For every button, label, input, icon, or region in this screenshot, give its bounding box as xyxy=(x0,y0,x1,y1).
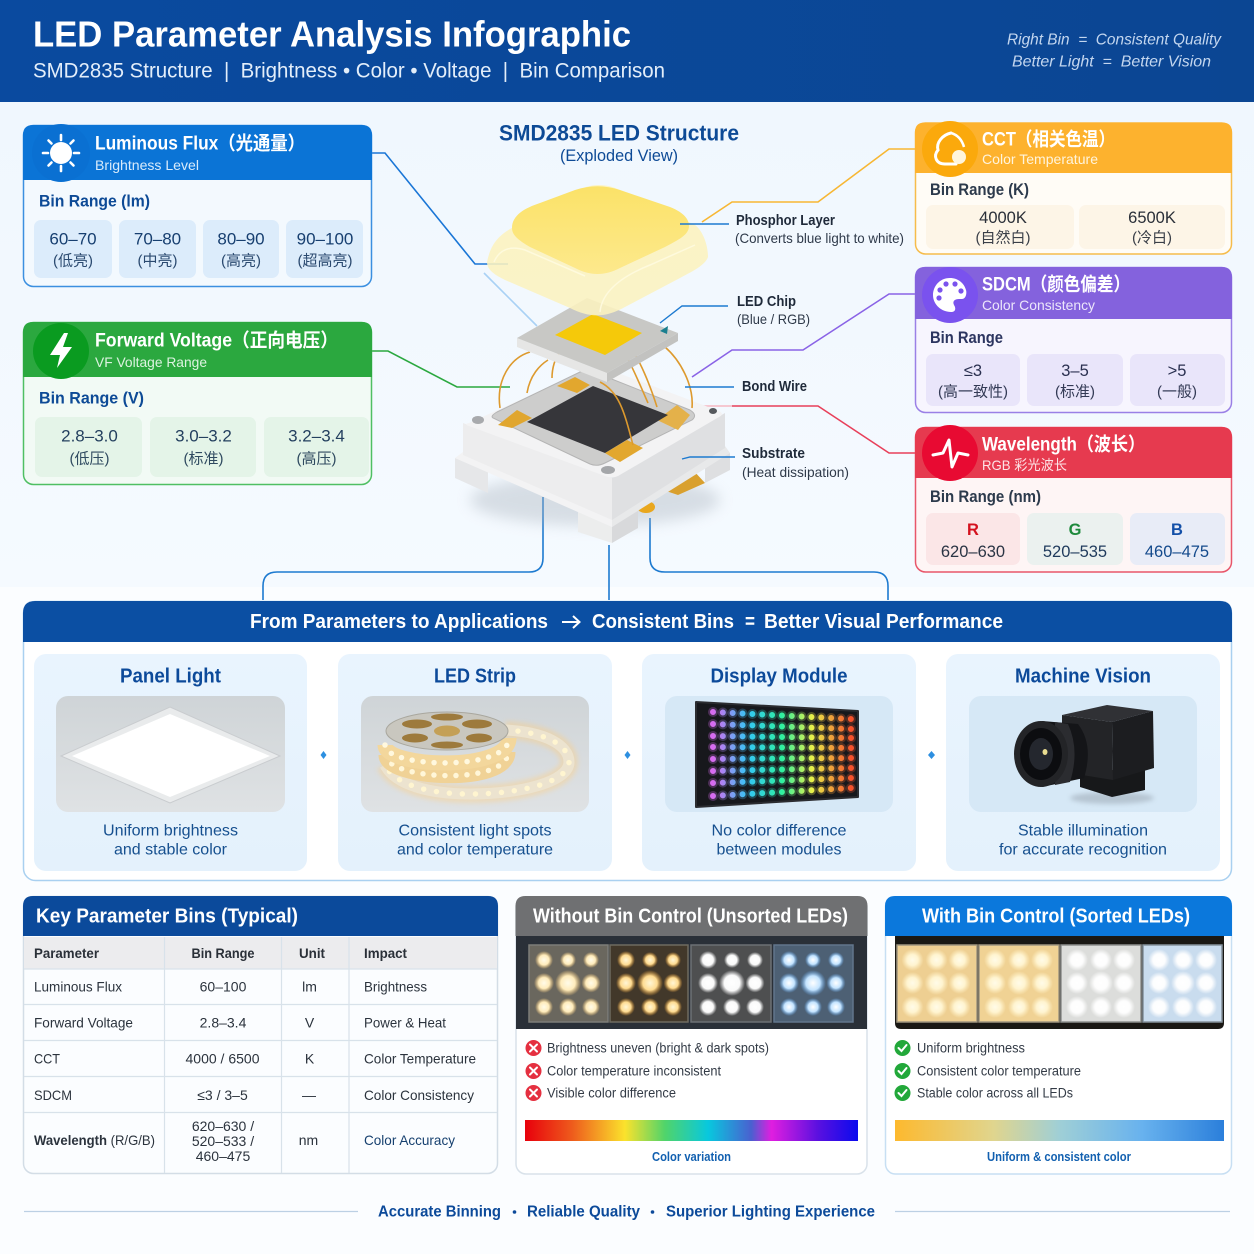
card: machine vision: Machine Vision xyxy=(1015,664,1151,688)
bin cells: (超高亮) xyxy=(298,252,352,270)
label: substrate: Substrate xyxy=(742,446,805,462)
mounting holes xyxy=(472,416,484,424)
panel: without bin control: Without Bin Control (Unsorted LEDs) xyxy=(533,906,848,928)
title: LED Parameter Analysis Infographic xyxy=(33,14,631,54)
table rows: SDCM xyxy=(34,1087,72,1103)
table rows: Brightness xyxy=(364,978,427,994)
table rows: 2.8–3.4 xyxy=(200,1014,247,1030)
banner heading xyxy=(250,611,1003,633)
table rows xyxy=(34,978,476,1164)
panel: SDCM: Color Consistency xyxy=(982,297,1095,313)
icon: check xyxy=(894,1063,910,1079)
upper section background xyxy=(0,102,1254,587)
panel: wavelength xyxy=(915,425,1232,572)
table rows: lm xyxy=(302,978,317,994)
icon: cross xyxy=(526,1063,542,1079)
panel: SDCM xyxy=(915,267,1232,412)
substrate base xyxy=(455,366,730,543)
bin cells xyxy=(926,205,1225,249)
panel: with bin control: With Bin Control (Sorted LEDs) xyxy=(922,906,1190,928)
panel: without bin control xyxy=(516,896,868,1174)
footer tagline: Superior Lighting Experience xyxy=(666,1204,875,1220)
panel: luminous flux: Luminous Flux（光通量） xyxy=(95,132,305,154)
bin cells: (中亮) xyxy=(138,252,178,270)
icon: arrow xyxy=(562,616,580,628)
bin cells: (冷白) xyxy=(1132,230,1172,246)
structure heading xyxy=(499,120,739,165)
icon: cross xyxy=(526,1085,542,1101)
panel: forward voltage: Bin Range (V) xyxy=(39,388,144,408)
issue list: Visible color difference xyxy=(547,1086,676,1100)
table rows: Luminous Flux xyxy=(34,978,122,994)
card: panel light: Uniform brightness xyxy=(103,822,238,840)
LED chip plate xyxy=(517,298,678,382)
card: panel light: Panel Light xyxy=(120,664,221,688)
image: industrial camera xyxy=(969,696,1197,812)
bin cells: >5 xyxy=(1168,362,1186,380)
bin cells: 460–475 xyxy=(1145,543,1209,561)
bin cells: (标准) xyxy=(184,450,224,468)
header tagline xyxy=(1007,32,1222,70)
panel: key parameter table xyxy=(23,896,498,1174)
uniform color bar xyxy=(895,1120,1224,1141)
icon: check xyxy=(894,1085,910,1101)
card: LED strip: Consistent light spots xyxy=(398,822,552,840)
bin cells xyxy=(926,513,1225,565)
color variation bar xyxy=(525,1120,858,1141)
panel: CCT xyxy=(915,121,1232,254)
image: sorted LED panels xyxy=(895,936,1224,1029)
panel: CCT: Bin Range (K) xyxy=(930,181,1029,199)
table header row: Bin Range xyxy=(192,945,255,961)
table rows: Color Consistency xyxy=(364,1087,474,1103)
table header row: Unit xyxy=(299,945,325,961)
panel: wavelength: Bin Range (nm) xyxy=(930,488,1041,506)
issue list: Color temperature inconsistent xyxy=(547,1064,721,1078)
table rows: nm xyxy=(299,1132,318,1148)
header band xyxy=(0,0,1254,102)
LED exploded structure illustration xyxy=(455,185,730,543)
panel: with bin control xyxy=(885,896,1232,1174)
gold pads xyxy=(557,377,590,393)
subtitle: SMD2835 Structure | Brightness • Color • Voltage | Bin Comparison xyxy=(33,60,665,82)
benefit list xyxy=(894,1040,1081,1101)
label: phosphor layer xyxy=(735,213,904,246)
structure leader lines xyxy=(660,224,735,459)
bond wires xyxy=(499,347,692,445)
benefit list: Consistent color temperature xyxy=(917,1064,1081,1078)
table rows: 60–100 xyxy=(200,978,247,994)
bin cells: (高一致性) xyxy=(938,384,1008,400)
icon: pulse wave xyxy=(922,425,978,481)
arrow marker xyxy=(624,751,630,759)
benefit list: Uniform brightness xyxy=(917,1040,1025,1056)
bin cells: 60–70 xyxy=(49,230,97,248)
table rows: CCT xyxy=(34,1050,60,1066)
bin cells: (高亮) xyxy=(221,252,261,270)
icon: palette xyxy=(922,267,978,323)
table rows: Color Accuracy xyxy=(364,1132,455,1148)
table rows: ≤3 / 3–5 xyxy=(197,1087,248,1103)
card: machine vision: Stable illumination xyxy=(1018,822,1148,840)
connector lines: parameters to structure xyxy=(263,149,915,600)
table rows: V xyxy=(305,1014,315,1030)
table header row: Parameter xyxy=(34,945,100,961)
bin cells: 620–630 xyxy=(941,543,1005,561)
label: bond wire: Bond Wire xyxy=(742,379,807,395)
label: LED chip xyxy=(737,294,810,327)
bin cells: 3.0–3.2 xyxy=(175,426,232,446)
card: machine vision xyxy=(946,654,1220,871)
card: display module: Display Module xyxy=(710,664,848,688)
table rows: Wavelength (R/G/B) xyxy=(34,1132,155,1148)
card: LED strip: LED Strip xyxy=(434,664,516,688)
bin cells xyxy=(926,354,1225,406)
table rows: 620–630 / xyxy=(192,1118,254,1134)
label: substrate xyxy=(742,446,849,480)
panel: with bin control: Uniform & consistent color xyxy=(987,1150,1131,1164)
image: unsorted LED panels xyxy=(516,936,867,1029)
card: display module: No color difference xyxy=(712,822,847,840)
panel: wavelength: RGB 彩光波长 xyxy=(982,457,1067,473)
label: phosphor layer: (Converts blue light to white) xyxy=(735,230,904,246)
panel: SDCM: Bin Range xyxy=(930,329,1003,347)
panel: applications xyxy=(23,601,1232,880)
bin cells: R xyxy=(967,521,979,539)
bin cells: (低压) xyxy=(70,450,110,468)
structure heading: SMD2835 LED Structure xyxy=(499,120,739,146)
panel: CCT: Color Temperature xyxy=(982,151,1098,167)
panel: luminous flux xyxy=(23,124,372,286)
table rows: 4000 / 6500 xyxy=(186,1050,260,1066)
bin cells xyxy=(35,417,369,477)
banner heading: Consistent Bins xyxy=(592,611,734,633)
panel: CCT: CCT（相关色温） xyxy=(982,128,1115,150)
card: panel light: and stable color xyxy=(114,842,228,858)
bin cells: (一般) xyxy=(1157,384,1197,400)
bin cells: (标准) xyxy=(1055,384,1095,400)
phosphor layer dome xyxy=(487,185,708,315)
header tagline: Better Light = Better Vision xyxy=(1012,54,1211,70)
label: LED chip: (Blue / RGB) xyxy=(737,311,810,327)
bin cells: 70–80 xyxy=(134,230,181,248)
card: display module: between modules xyxy=(716,842,842,858)
panel: forward voltage: VF Voltage Range xyxy=(95,354,207,370)
bin cells: (自然白) xyxy=(976,230,1030,246)
label: LED chip: LED Chip xyxy=(737,294,796,310)
structure heading: (Exploded View) xyxy=(560,147,678,165)
panel: SDCM: SDCM（颜色偏差） xyxy=(982,274,1130,296)
bin cells: G xyxy=(1069,521,1081,539)
footer tagline xyxy=(24,1204,1230,1220)
bin cells xyxy=(34,220,363,278)
table rows: K xyxy=(305,1050,315,1066)
bin cells: 2.8–3.0 xyxy=(61,426,118,446)
icon: cross xyxy=(526,1040,542,1056)
bin cells: 3.2–3.4 xyxy=(288,426,345,446)
banner heading: From Parameters to Applications xyxy=(250,611,548,633)
image: flat panel xyxy=(56,696,285,812)
panel: forward voltage: Forward Voltage（正向电压） xyxy=(95,330,338,352)
panel: key parameter table: Key Parameter Bins (Typical) xyxy=(36,906,298,928)
panel: luminous flux: Bin Range (lm) xyxy=(39,192,150,210)
table rows: Color Temperature xyxy=(364,1050,476,1066)
card: LED strip xyxy=(338,654,612,871)
bin cells: 4000K xyxy=(979,209,1027,227)
panel: forward voltage xyxy=(23,322,372,484)
image: LED strip reel xyxy=(361,696,589,812)
bin cells: 80–90 xyxy=(217,230,265,248)
table rows: Forward Voltage xyxy=(34,1014,133,1030)
banner heading: = xyxy=(745,611,755,633)
banner heading: Better Visual Performance xyxy=(764,611,1003,633)
table rows: 460–475 xyxy=(196,1148,250,1164)
card: panel light xyxy=(34,654,307,871)
icon: sun xyxy=(32,124,90,182)
label: substrate: (Heat dissipation) xyxy=(742,464,849,480)
black die xyxy=(527,386,668,453)
issue list: Brightness uneven (bright & dark spots) xyxy=(547,1040,769,1056)
table rows: 520–533 / xyxy=(192,1133,254,1149)
bin cells: (低亮) xyxy=(53,252,93,270)
footer tagline: Reliable Quality xyxy=(527,1204,640,1220)
bin cells: 90–100 xyxy=(297,230,353,248)
table header row: Impact xyxy=(364,945,407,961)
label: phosphor layer: Phosphor Layer xyxy=(736,213,835,229)
footer tagline: Accurate Binning xyxy=(378,1204,501,1220)
bin cells: B xyxy=(1171,521,1183,539)
card: LED strip: and color temperature xyxy=(397,842,553,858)
icon: color temperature xyxy=(922,121,978,177)
panel: wavelength: Wavelength（波长） xyxy=(982,434,1145,456)
icon: lightning bolt xyxy=(33,323,89,379)
panel: without bin control: Color variation xyxy=(652,1150,731,1164)
panel: luminous flux: Brightness Level xyxy=(95,157,199,173)
bin cells: 3–5 xyxy=(1061,362,1089,380)
header tagline: Right Bin = Consistent Quality xyxy=(1007,32,1222,48)
table header row xyxy=(24,937,497,969)
table rows: Power & Heat xyxy=(364,1014,446,1030)
arrow marker xyxy=(928,751,935,759)
card: machine vision: for accurate recognition xyxy=(999,842,1167,858)
bin cells: 6500K xyxy=(1128,209,1176,227)
bin cells: 520–535 xyxy=(1043,543,1107,561)
icon: check xyxy=(894,1040,910,1056)
benefit list: Stable color across all LEDs xyxy=(917,1086,1073,1100)
bin cells: ≤3 xyxy=(964,362,982,380)
arrow marker xyxy=(320,751,326,759)
issue list xyxy=(526,1040,769,1101)
shadow xyxy=(470,474,720,526)
bin cells: (高压) xyxy=(296,450,336,468)
card: display module xyxy=(642,654,916,871)
image: LED matrix display xyxy=(665,696,893,812)
table rows: — xyxy=(302,1087,316,1103)
